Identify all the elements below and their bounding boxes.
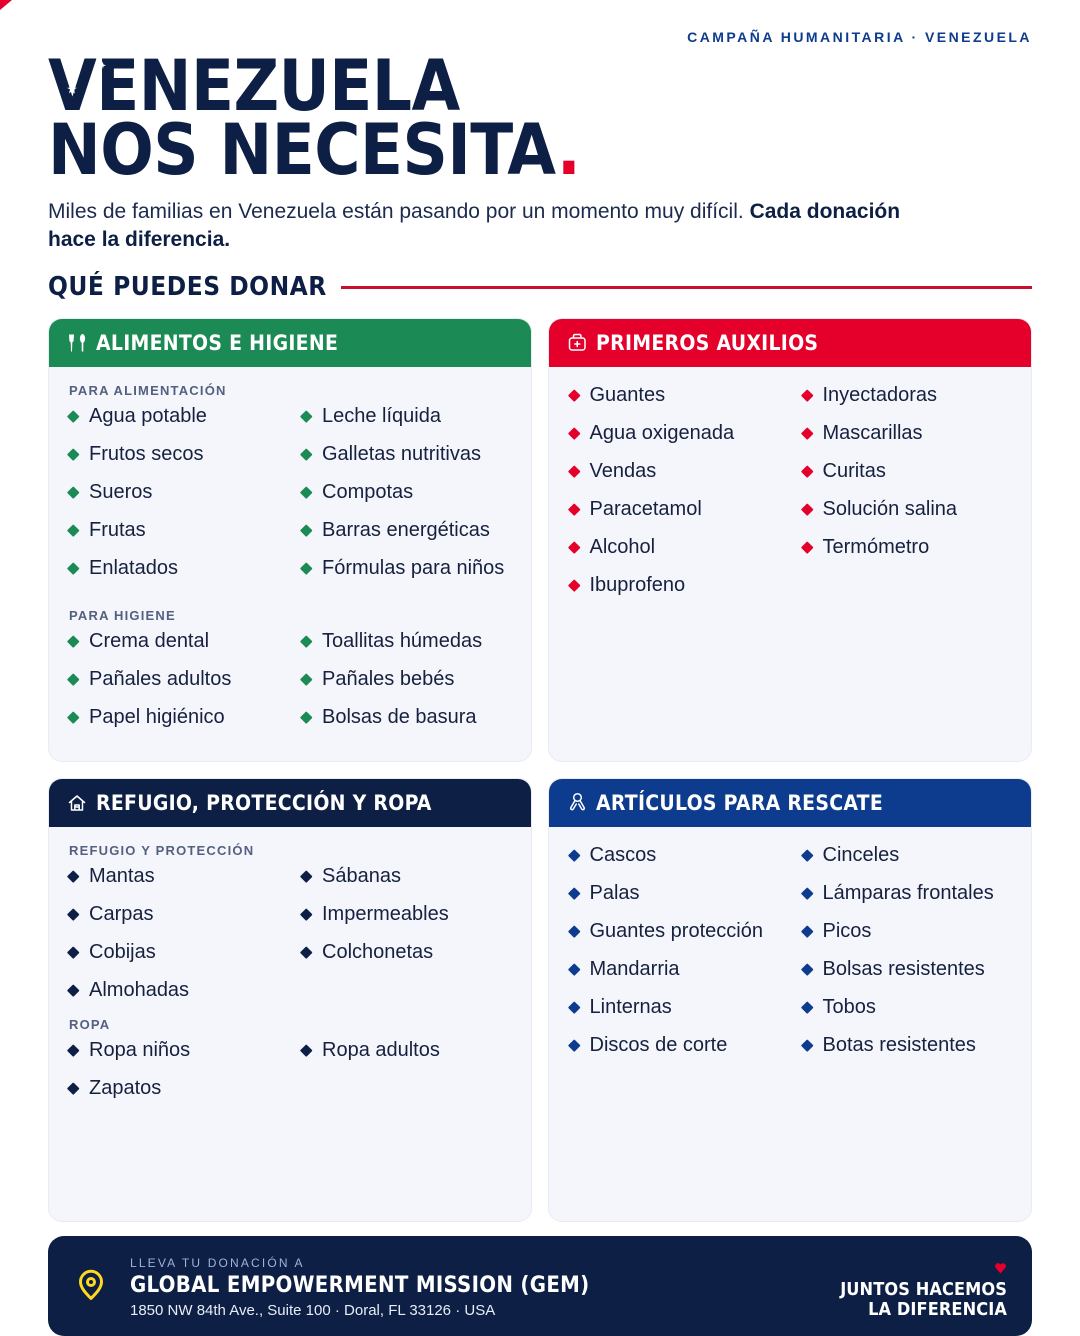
- panel: primeros auxilios: Solución salina: [822, 498, 957, 520]
- panel: refugio, protección y ropa: Mantas: [89, 865, 155, 887]
- panel: alimentos e higiene: Crema dental: [89, 630, 209, 652]
- footer slogan: LA DIFERENCIA: [868, 1299, 1007, 1320]
- intro text: Miles de familias en Venezuela están pasando por un momento muy difícil. Cada donación: [48, 200, 900, 223]
- corner accent: [0, 0, 12, 10]
- panel: refugio, protección y ropa: Impermeables: [322, 903, 449, 925]
- panel: refugio, protección y ropa: Carpas: [89, 903, 153, 925]
- panel header: rescate: [549, 779, 1031, 827]
- panel: artículos para rescate: Tobos: [822, 996, 876, 1018]
- panel: primeros auxilios: Curitas: [822, 460, 886, 482]
- panel: primeros auxilios: Paracetamol: [590, 498, 702, 520]
- panel: primeros auxilios: Mascarillas: [822, 422, 923, 444]
- title star marks: [67, 62, 106, 94]
- panel: alimentos e higiene: Agua potable: [89, 405, 207, 427]
- panel: alimentos e higiene: Frutas: [89, 519, 146, 541]
- panel: primeros auxilios: Vendas: [590, 460, 656, 482]
- panel: primeros auxilios: Ibuprofeno: [590, 574, 685, 596]
- panel: refugio, protección y ropa: Ropa adultos: [322, 1039, 440, 1061]
- panel: artículos para rescate: Mandarria: [590, 958, 680, 980]
- panel: alimentos e higiene: Galletas nutritivas: [322, 443, 481, 465]
- footer organisation name: GLOBAL EMPOWERMENT MISSION (GEM): [130, 1273, 590, 1298]
- panel: artículos para rescate: Palas: [590, 882, 640, 904]
- panel header: refugio: [49, 779, 531, 827]
- panel: primeros auxilios: Termómetro: [822, 536, 929, 558]
- panel: primeros auxilios: Guantes: [590, 384, 665, 406]
- panel: refugio, protección y ropa: Almohadas: [89, 979, 189, 1001]
- title: [48, 45, 580, 191]
- panel: alimentos e higiene: Leche líquida: [322, 405, 441, 427]
- panel header: alimentos: [49, 319, 531, 367]
- icon: house: [68, 795, 86, 811]
- panel: primeros auxilios: Inyectadoras: [822, 384, 937, 406]
- panel: artículos para rescate: [548, 778, 1032, 1222]
- panel: artículos para rescate: Linternas: [590, 996, 672, 1018]
- panel header: primeros auxilios: [549, 319, 1031, 367]
- panel: primeros auxilios: Alcohol: [590, 536, 655, 558]
- panel: alimentos e higiene: Compotas: [322, 481, 413, 503]
- panel: refugio, protección y ropa: [48, 778, 532, 1222]
- panel: alimentos e higiene: Frutos secos: [89, 443, 203, 465]
- subheading: PARA HIGIENE: [69, 608, 176, 623]
- campaign label: CAMPAÑA HUMANITARIA · VENEZUELA: [687, 29, 1032, 45]
- intro text: [48, 200, 900, 251]
- intro text: hace la diferencia.: [48, 228, 230, 251]
- panel: artículos para rescate: Guantes protección: [590, 920, 763, 942]
- panel: alimentos e higiene: Pañales adultos: [89, 668, 231, 690]
- panel: artículos para rescate: Discos de corte: [590, 1034, 727, 1056]
- panel header: primeros auxilios: PRIMEROS AUXILIOS: [596, 331, 818, 355]
- panel header: refugio: REFUGIO, PROTECCIÓN Y ROPA: [96, 791, 432, 815]
- panel: alimentos e higiene: Enlatados: [89, 557, 178, 579]
- panel: artículos para rescate: Bolsas resistentes: [822, 958, 985, 980]
- icon: utensils: [69, 334, 86, 352]
- footer slogan: [839, 1279, 1007, 1320]
- footer small label: LLEVA TU DONACIÓN A: [130, 1256, 305, 1270]
- footer address: 1850 NW 84th Ave., Suite 100 · Doral, FL 33126 · USA: [130, 1302, 495, 1319]
- panel: refugio, protección y ropa: Zapatos: [89, 1077, 161, 1099]
- panel: alimentos e higiene: Papel higiénico: [89, 706, 225, 728]
- icon: heart: [995, 1263, 1006, 1274]
- section heading: QUÉ PUEDES DONAR: [48, 272, 327, 302]
- footer banner: [48, 1236, 1032, 1336]
- subheading: REFUGIO Y PROTECCIÓN: [69, 843, 254, 858]
- footer slogan: JUNTOS HACEMOS: [840, 1279, 1007, 1300]
- panel header: rescate: ARTÍCULOS PARA RESCATE: [596, 791, 883, 815]
- panel: refugio, protección y ropa: Sábanas: [322, 865, 401, 887]
- icon: carabiner rope: [570, 793, 585, 810]
- panel: alimentos e higiene: [48, 318, 532, 762]
- panel: artículos para rescate: Botas resistentes: [822, 1034, 976, 1056]
- panel: alimentos e higiene: Sueros: [89, 481, 152, 503]
- title: VENEZUELA: [48, 45, 460, 127]
- icon: first aid kit: [568, 334, 586, 351]
- panel: refugio, protección y ropa: Ropa niños: [89, 1039, 190, 1061]
- panel: alimentos e higiene: Bolsas de basura: [322, 706, 477, 728]
- subheading: ROPA: [69, 1017, 110, 1032]
- panel: artículos para rescate: Cinceles: [822, 844, 899, 866]
- panel: artículos para rescate: Cascos: [590, 844, 656, 866]
- panel: artículos para rescate: Lámparas frontales: [822, 882, 994, 904]
- title: NOS NECESITA.: [48, 109, 580, 191]
- panel: refugio, protección y ropa: Cobijas: [89, 941, 156, 963]
- panel header: alimentos: ALIMENTOS E HIGIENE: [96, 331, 338, 355]
- panel: refugio, protección y ropa: Colchonetas: [322, 941, 433, 963]
- panel: alimentos e higiene: Toallitas húmedas: [322, 630, 482, 652]
- panel: primeros auxilios: [548, 318, 1032, 762]
- panel: alimentos e higiene: Fórmulas para niños: [322, 557, 504, 579]
- icon: location pin: [79, 1270, 103, 1300]
- panel: alimentos e higiene: Pañales bebés: [322, 668, 454, 690]
- panel: artículos para rescate: Picos: [822, 920, 871, 942]
- panel: primeros auxilios: Agua oxigenada: [590, 422, 734, 444]
- subheading: PARA ALIMENTACIÓN: [69, 383, 227, 398]
- panel: alimentos e higiene: Barras energéticas: [322, 519, 490, 541]
- heading rule: [341, 286, 1032, 289]
